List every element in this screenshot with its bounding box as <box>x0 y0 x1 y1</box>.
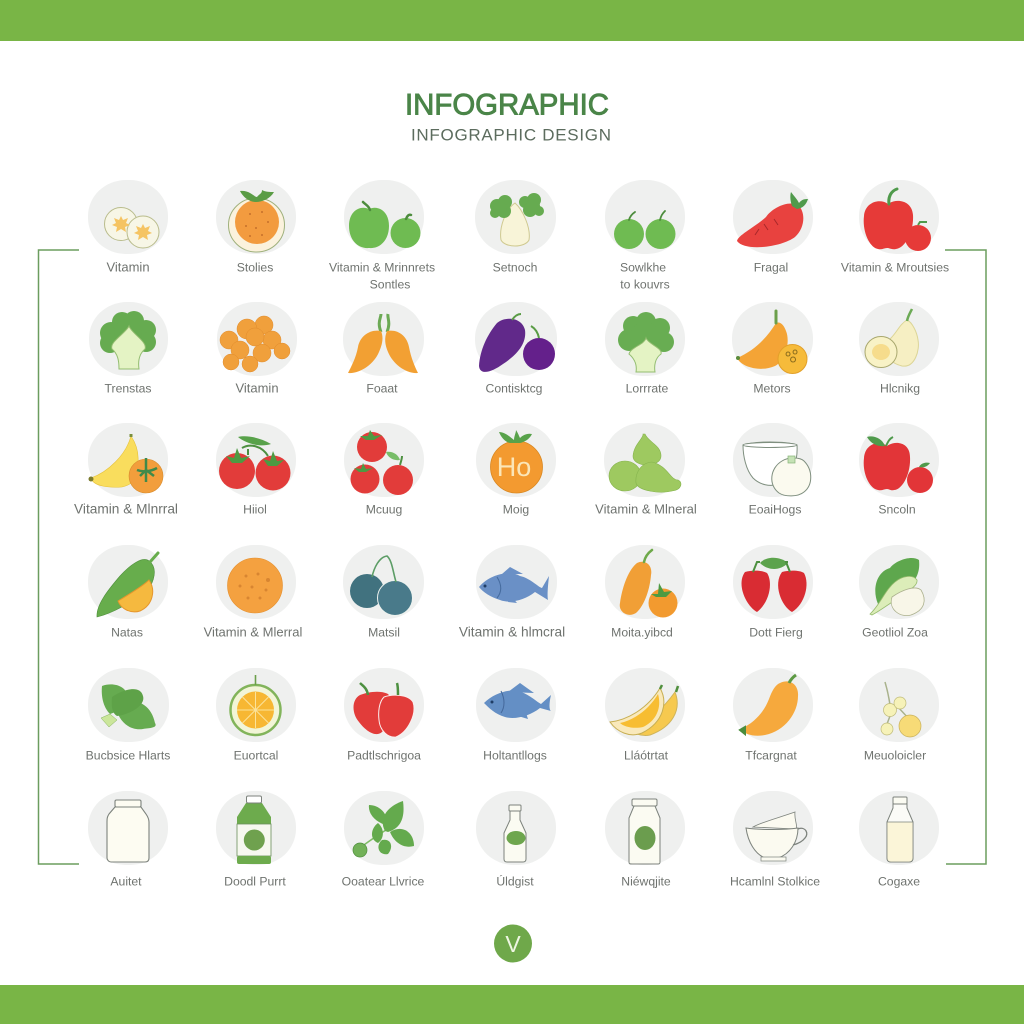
icon: melon slices <box>104 208 159 248</box>
cell: r6c4 small bottle <box>476 791 556 888</box>
label: Tfcargnat <box>745 748 797 762</box>
icon: pale fruit <box>881 682 921 737</box>
cell: r4c6 red peppers <box>733 545 813 640</box>
label: Vitamin & Mrinnrets <box>329 260 435 274</box>
label: Moita.yibcd <box>611 626 673 640</box>
cell: r4c7 lettuce and garlic <box>859 545 939 640</box>
label: EoaiHogs <box>749 502 801 516</box>
label: Trenstas <box>105 382 151 396</box>
icon: milk bottle <box>887 797 913 862</box>
label: Hlcnikg <box>880 382 920 396</box>
cell: r3c4 orange with text <box>476 423 556 516</box>
icon: blue fish <box>484 683 551 719</box>
label: Niéwqjite <box>621 874 671 888</box>
cell: r1c3 green apples <box>329 180 435 292</box>
cell: r1c4 cauliflower <box>475 180 556 274</box>
cell: r6c3 herbs <box>342 791 425 888</box>
label: Vitamin & Mlnrral <box>74 502 178 516</box>
cell: r4c1 green carrot <box>88 545 168 640</box>
label: Vitamin & Mroutsies <box>841 260 949 274</box>
icon: broccoli <box>100 311 156 369</box>
cell: r1c6 red pepper <box>733 180 813 274</box>
label: Auitet <box>110 874 142 888</box>
label line 2: Sontles <box>370 278 410 292</box>
label: Holtantllogs <box>483 748 547 762</box>
label: Vitamin <box>106 260 150 274</box>
icon: two red apples <box>354 683 414 737</box>
icon: red apples <box>864 189 931 251</box>
cell: r6c2 green bottle <box>216 791 296 888</box>
label: Vitamin & Mlneral <box>595 502 697 516</box>
icon: broccoli <box>618 312 674 372</box>
subtitle: INFOGRAPHIC DESIGN <box>411 126 611 144</box>
label: Sowlkhe <box>620 260 666 274</box>
label: Úldgist <box>496 874 534 888</box>
cell: r1c1 melon slices <box>88 180 168 274</box>
icon: tomatoes <box>219 436 290 490</box>
cell: r5c1 green leaves <box>86 668 170 762</box>
badge: V logo <box>494 924 532 962</box>
icon: citrus slice <box>230 675 280 735</box>
cell: r5c7 pale fruit cluster <box>859 668 939 762</box>
cell: r5c6 mango <box>733 668 813 762</box>
cell: r2c2 orange cluster <box>217 302 297 396</box>
cell: r4c4 blue fish <box>459 545 565 640</box>
title: INFOGRAPHIC <box>405 88 609 122</box>
cell: r6c5 label jar <box>605 791 685 888</box>
cell: r1c2 orange <box>216 180 296 274</box>
icon: banana and orange <box>88 434 163 493</box>
icon: red apples <box>864 436 933 493</box>
label: Metors <box>753 382 791 396</box>
label: Vitamin <box>235 380 279 396</box>
icon: orange cluster <box>220 316 290 372</box>
cell: r4c2 orange disk <box>204 545 302 640</box>
top green band <box>0 0 1024 41</box>
icon: orange disk <box>228 558 282 613</box>
icon: three tomatoes <box>350 430 413 495</box>
label: Ooatear Llvrice <box>342 874 425 888</box>
icon: green pears <box>609 434 681 492</box>
label: Sncoln <box>878 502 916 516</box>
icon: lemon wedges <box>610 685 678 736</box>
icon: red pepper <box>737 192 808 247</box>
cell: r3c1 banana and orange <box>74 423 178 516</box>
icon: pear and slice <box>865 309 918 368</box>
label: Doodl Purrt <box>224 874 286 888</box>
cell: r3c3 tomato trio <box>344 423 424 516</box>
icon: orange mango <box>740 675 798 736</box>
icon: lettuce and bulb <box>870 558 924 616</box>
icon: cream boat <box>746 812 807 861</box>
icon: mango and slice <box>736 311 807 374</box>
label: Foaat <box>366 382 398 396</box>
label: Moig <box>503 502 529 516</box>
label: Mcuug <box>366 502 402 516</box>
cell: r3c2 tomatoes <box>216 423 296 516</box>
label: Geotliol Zoa <box>862 626 928 640</box>
label: Stolies <box>237 260 273 274</box>
icon: carrots <box>348 314 418 373</box>
label: Fragal <box>754 260 788 274</box>
icon: jar with green label <box>629 799 660 864</box>
icon: green apples <box>349 202 420 248</box>
icon: bowl and white apple <box>743 442 811 496</box>
cell: r4c5 carrot and tomato <box>605 545 685 640</box>
icon: eggplant and plum <box>479 314 555 372</box>
badge letter: V <box>505 931 521 957</box>
cell: r3c6 bowl and apple <box>733 423 813 516</box>
label: Euortcal <box>234 748 278 762</box>
icon: two green apples <box>614 211 676 249</box>
label: Vitamin & Mlerral <box>204 624 302 640</box>
cell: r3c5 green pears <box>595 423 697 516</box>
icon: blue fish <box>479 567 549 603</box>
icon: cucumber and orange slice <box>97 553 158 617</box>
label: Bucbsice Hlarts <box>86 748 170 762</box>
label: Hcamlnl Stolkice <box>730 874 820 888</box>
cell: r1c5 green apples <box>605 180 685 292</box>
icon: jar <box>107 800 149 862</box>
cell: r6c7 milk bottle <box>859 791 939 888</box>
label: Cogaxe <box>878 874 920 888</box>
cell: r1c7 red apples <box>841 180 949 274</box>
cell: r2c1 broccoli <box>89 302 168 396</box>
cell: r2c5 broccoli <box>605 302 685 396</box>
label: Dott Fierg <box>749 626 803 640</box>
cell: r5c2 citrus slice <box>216 668 296 762</box>
label: Natas <box>111 626 143 640</box>
bottom green band <box>0 985 1024 1024</box>
label: Matsil <box>368 626 400 640</box>
cell: r2c6 mango <box>732 302 813 396</box>
cell: r2c3 carrots <box>343 302 424 396</box>
icon: orange half <box>228 190 284 252</box>
label: Setnoch <box>493 260 537 274</box>
cell: r5c4 blue fish <box>476 668 556 762</box>
cell: r6c1 white jar <box>88 791 168 888</box>
cell: r4c3 blueberries <box>343 545 424 640</box>
icon: bok choy <box>490 193 544 246</box>
left bracket <box>38 250 79 864</box>
label: Contisktcg <box>486 382 542 396</box>
cell: r2c4 eggplant <box>475 302 557 396</box>
label: Lorrrate <box>626 382 669 396</box>
icon: small bottle <box>504 805 526 862</box>
cell: r5c3 red apples <box>344 668 424 762</box>
icon: carrot and tomato <box>620 550 678 618</box>
label: Vitamin & hlmcral <box>459 624 565 640</box>
icon: blueberries <box>350 556 412 616</box>
label line 2: to kouvrs <box>620 278 670 292</box>
label: Padtlschrigoa <box>347 748 421 762</box>
icon: herb sprig <box>353 801 414 857</box>
label: Lláótrtat <box>624 748 669 762</box>
label: Meuoloicler <box>864 748 926 762</box>
cell: r6c6 gravy boat <box>730 791 820 888</box>
label: Hiiol <box>243 502 267 516</box>
cell: r3c7 red apples <box>859 423 939 516</box>
right bracket <box>945 250 986 864</box>
icon: red peppers <box>742 558 807 612</box>
cell: r5c5 lemon slices <box>605 668 685 762</box>
icon: spinach leaves <box>101 684 156 729</box>
digits on orange: Ho <box>497 452 531 482</box>
cell: r2c7 pear <box>859 302 939 396</box>
icon: green bottle <box>237 796 271 864</box>
